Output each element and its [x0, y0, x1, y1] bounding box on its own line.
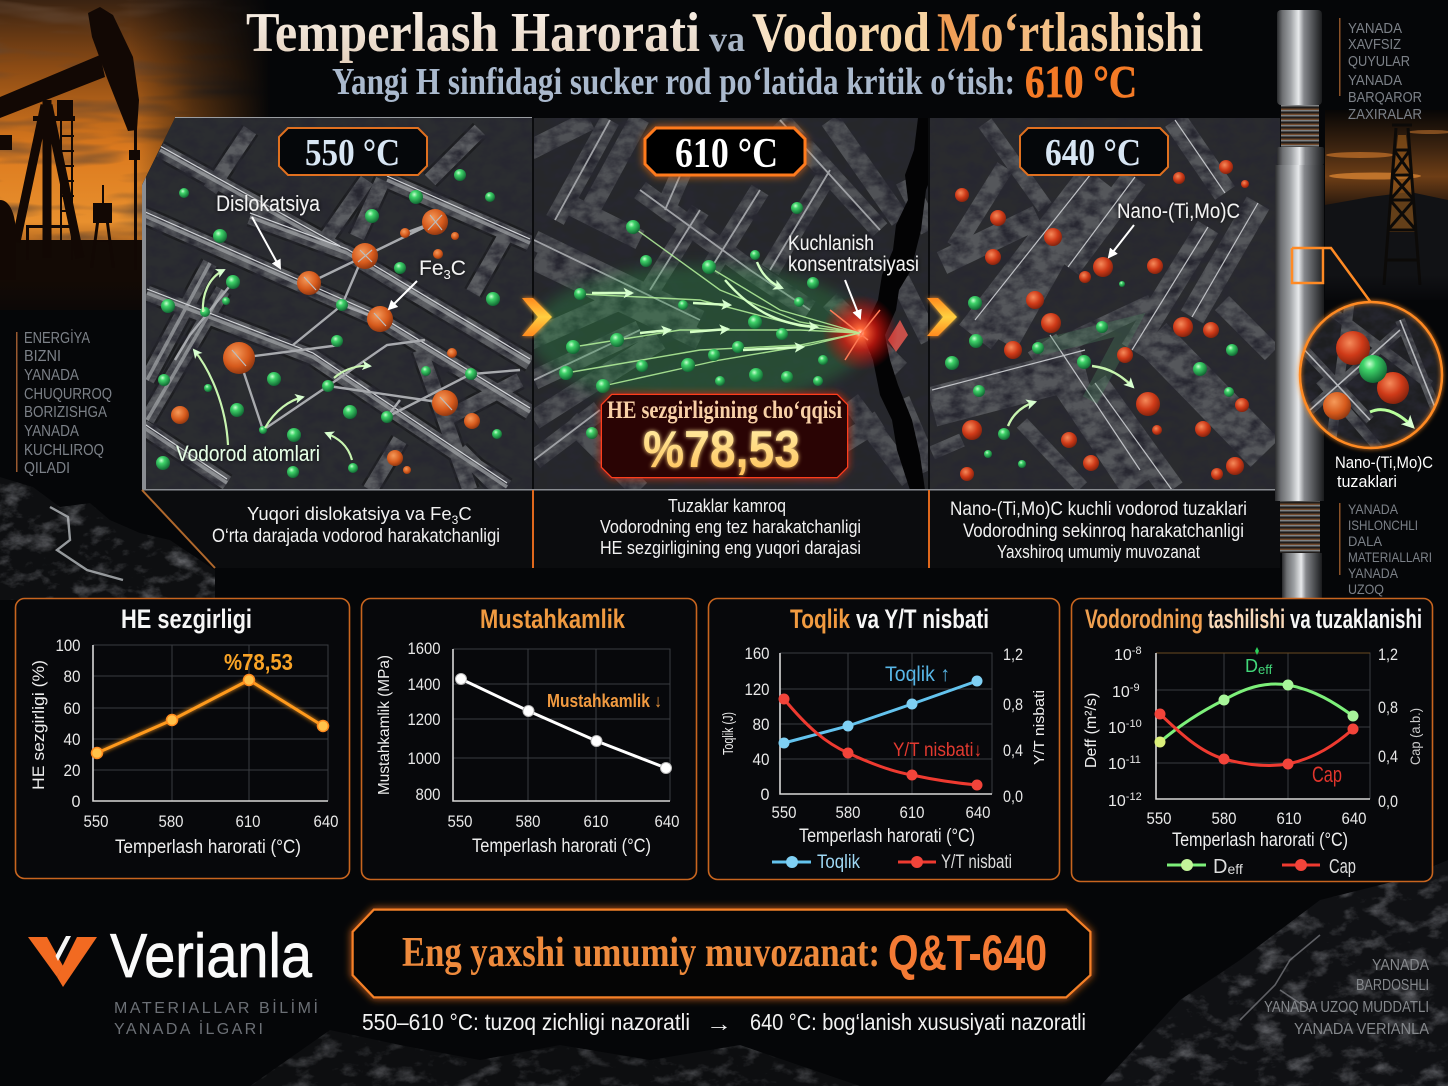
chart panel: Mustahkamlik — [362, 598, 696, 880]
sucker rod — [1275, 10, 1442, 598]
right lower text: YANADA — [1348, 565, 1399, 581]
line chart: Deff and Cap: 640 — [1342, 809, 1366, 828]
panel: 610 °C — [530, 118, 936, 490]
left side text: YANADA — [24, 423, 79, 440]
chart panel: Vodorodning tashilishi va tuzaklanishi — [1072, 598, 1432, 882]
panel: 640 °C — [930, 118, 1280, 490]
right lower text: DALA — [1348, 533, 1383, 549]
caption 610: HE sezgirligining eng yuqori darajasi — [600, 537, 861, 558]
label: Dislokatsiya: Dislokatsiya — [216, 191, 321, 216]
text: control mechanism: → — [706, 1011, 732, 1036]
line chart: HE sensitivity: 640 — [314, 812, 338, 831]
left side text: BORIZISHGA — [24, 404, 107, 421]
left side text: QILADI — [24, 460, 70, 477]
line chart: toughness and Y/T: 0,4 — [1003, 741, 1023, 760]
line chart: HE sensitivity: 100 — [56, 636, 80, 655]
arrows: hydrogen motion — [194, 270, 370, 460]
caption 550: C — [458, 503, 472, 524]
scene: mountain and rocks lower left — [0, 475, 215, 600]
caption 610 — [600, 495, 861, 558]
line chart: Deff and Cap: 0,0 — [1378, 792, 1398, 811]
label: stress concentration: konsentratsiyasi — [788, 253, 919, 276]
legend — [772, 852, 1012, 873]
right top text: YANADA — [1348, 73, 1402, 89]
caption 640: Yaxshiroq umumiy muvozanat — [997, 541, 1200, 562]
icon: logo mark — [28, 936, 97, 987]
scene: sunset with oil pumpjack — [0, 0, 300, 480]
line chart: Deff and Cap: 10 — [1108, 720, 1126, 737]
text: control mechanism: 640 °C: bog‘lanish xususiyati nazoratli — [750, 1009, 1086, 1035]
arrows: chevrons between panels — [522, 298, 957, 336]
line chart: HE sensitivity: 80 — [64, 667, 80, 686]
line chart: HE sensitivity: 610 — [236, 812, 260, 831]
line chart: HE sensitivity: 60 — [64, 699, 80, 718]
line chart: Deff and Cap: Cap — [1312, 762, 1342, 787]
left side text: BIZNI — [24, 348, 61, 365]
legend: Toqlik — [817, 852, 860, 873]
line chart: strength: 640 — [654, 812, 680, 831]
title — [246, 2, 1203, 64]
right top text — [1339, 18, 1422, 123]
label: Fe3C: 3 — [444, 267, 451, 282]
line chart: strength: 1600 — [408, 639, 440, 658]
captions under panels — [142, 489, 1280, 568]
spheres: hydrogen atoms — [945, 281, 1238, 468]
label: Nano-(Ti,Mo)C — [1109, 200, 1240, 257]
callout: zoom box and lens — [1292, 248, 1442, 450]
label: Nano-(Ti,Mo)C: Nano-(Ti,Mo)C — [1117, 200, 1240, 223]
line chart: strength: 550 — [448, 812, 472, 831]
line chart: toughness and Y/T: 580 — [836, 803, 860, 822]
line chart: Deff and Cap: -10 — [1126, 718, 1142, 730]
text: control mechanism — [362, 1009, 1086, 1036]
line chart: Deff and Cap: 580 — [1212, 809, 1236, 828]
right top text: BARQAROR — [1348, 90, 1422, 106]
chart heading — [1085, 604, 1422, 634]
callout: HE peak — [602, 395, 847, 479]
chart heading — [790, 604, 989, 634]
line chart: Deff and Cap: Cap (a.b.) — [1407, 708, 1423, 765]
spheres: Fe3C — [171, 209, 480, 474]
label: Fe3C — [389, 257, 466, 309]
spheres: nano carbides — [955, 160, 1249, 481]
right lower text: MATERIALLARI — [1348, 549, 1432, 565]
chart heading: va Y/T nisbati — [856, 604, 989, 634]
legend: eff — [1227, 861, 1243, 877]
title: Mo‘rtlashishi — [937, 2, 1203, 64]
line chart: Deff and Cap — [1083, 645, 1423, 851]
logo: Verianla: YANADA İLGARI — [114, 1019, 263, 1038]
title: va — [709, 19, 745, 59]
line chart: strength: 580 — [516, 812, 540, 831]
line chart: toughness and Y/T: 0,8 — [1003, 695, 1023, 714]
chart heading: HE sezgirligi — [121, 604, 252, 634]
legend: Cap — [1329, 856, 1356, 878]
caption 640: Nano-(Ti,Mo)C kuchli vodorod tuzaklari — [950, 498, 1247, 520]
line chart: toughness and Y/T: Temperlash harorati (°C) — [799, 826, 975, 847]
line chart: Deff and Cap: 1,2 — [1378, 645, 1398, 664]
line chart: strength — [376, 639, 680, 857]
right bottom text — [1264, 957, 1429, 1038]
line chart: Deff and Cap: D — [1245, 656, 1258, 676]
line chart: strength: 800 — [416, 785, 440, 804]
line chart: Deff and Cap: -9 — [1130, 682, 1140, 694]
line chart: strength: 1200 — [408, 710, 440, 729]
chart heading: tashilishi — [1208, 604, 1285, 634]
line chart: strength: Mustahkamlik ↓ — [547, 691, 662, 711]
caption 550: Yuqori dislokatsiya va Fe — [247, 503, 452, 524]
temperature badge: 640 °C — [1020, 128, 1168, 175]
line chart: strength: Mustahkamlik (MPa) — [376, 655, 393, 795]
right bottom text: YANADA — [1372, 957, 1429, 974]
crack — [822, 118, 936, 490]
label: stress concentration: Kuchlanish — [788, 232, 874, 255]
subtitle: 610 °C — [1025, 56, 1137, 107]
line chart: HE sensitivity: %78,53 — [224, 649, 293, 675]
spheres: hydrogen atoms — [559, 202, 828, 439]
right lower text: UZOQ — [1348, 581, 1384, 597]
line chart: toughness and Y/T — [720, 644, 1048, 847]
label: Fe3C: Fe — [419, 257, 444, 280]
caption 610: Vodorodning eng tez harakatchanligi — [600, 516, 861, 537]
right lower text: YANADA — [1348, 501, 1399, 517]
line chart: Deff and Cap: Temperlash harorati (°C) — [1172, 830, 1348, 851]
legend — [1167, 856, 1356, 878]
arrows: hydrogen motion — [1008, 366, 1133, 426]
right top text: XAVFSIZ — [1348, 37, 1401, 53]
rays to crack tip — [566, 227, 860, 386]
line chart: toughness and Y/T: 0,0 — [1003, 787, 1023, 806]
right top text: QUYULAR — [1348, 54, 1410, 70]
line chart: Deff and Cap: -8 — [1132, 645, 1142, 657]
logo: Verianla: Verianla — [110, 922, 312, 991]
label: nano traps: tuzaklari — [1337, 472, 1397, 491]
caption 610: Tuzaklar kamroq — [668, 495, 786, 516]
background — [252, 860, 1448, 1086]
line chart: Deff and Cap: 0,8 — [1378, 698, 1398, 717]
logo: Verianla — [28, 922, 318, 1038]
caption 550: 3 — [452, 513, 459, 527]
line chart: HE sensitivity: 580 — [158, 812, 184, 831]
microstructure bars 610 — [530, 118, 936, 490]
left side text: YANADA — [24, 367, 79, 384]
line chart: toughness and Y/T: 120 — [744, 680, 770, 699]
temperature badge: 610 °C: 610 °C — [675, 131, 778, 177]
text: control mechanism: 550–610 °C: tuzoq zichligi nazoratli — [362, 1009, 690, 1035]
line chart: strength: 610 — [584, 812, 608, 831]
label: nano traps: Nano-(Ti,Mo)C — [1335, 453, 1433, 472]
label: Vodorod atomlari: Vodorod atomlari — [176, 441, 320, 466]
line chart: toughness and Y/T: 0 — [760, 785, 770, 804]
line chart: toughness and Y/T: 550 — [772, 803, 796, 822]
left side text: CHUQURROQ — [24, 386, 112, 403]
arrows: hydrogen flow — [592, 262, 817, 350]
right bottom text: BARDOSHLI — [1356, 977, 1429, 994]
label: nano traps — [1335, 453, 1433, 491]
left side text: ENERGİYA — [24, 328, 90, 347]
label: stress concentration — [788, 232, 919, 318]
line chart: toughness and Y/T: 610 — [900, 803, 924, 822]
title: Vodorod — [752, 2, 930, 64]
callout: HE peak: HE sezgirligining cho‘qqisi — [607, 397, 842, 424]
scene: right sky and derrick — [1325, 110, 1448, 505]
line chart: Deff and Cap: Deff (m²/s) — [1083, 693, 1100, 768]
right bottom text: YANADA VERIANLA — [1294, 1021, 1429, 1038]
line chart: Deff and Cap: 0,4 — [1378, 747, 1398, 766]
right lower text: ISHLONCHLI — [1348, 517, 1418, 533]
icon: oil derrick — [1384, 125, 1420, 285]
line chart: toughness and Y/T: Toqlik (J) — [720, 712, 737, 755]
line chart: Deff and Cap: 10 — [1108, 793, 1126, 810]
legend: D — [1213, 856, 1227, 878]
line chart: toughness and Y/T: Y/T nisbati — [1031, 690, 1048, 765]
line chart: HE sensitivity: 550 — [84, 812, 108, 831]
line chart: strength: Temperlash harorati (°C) — [472, 836, 651, 857]
line chart: HE sensitivity: HE sezgirligi (%) — [29, 660, 48, 790]
left side text: KUCHLIROQ — [24, 442, 104, 459]
left side text — [16, 328, 112, 477]
line chart: strength: 1400 — [408, 675, 440, 694]
callout: best balance banner: Q&T-640 — [888, 925, 1047, 981]
line chart: toughness and Y/T: 40 — [752, 750, 770, 769]
right top text: YANADA — [1348, 21, 1402, 37]
line chart: Deff and Cap: -12 — [1126, 791, 1142, 803]
line chart: strength: 1000 — [408, 749, 440, 768]
logo: Verianla: MATERIALLAR BİLİMİ — [114, 998, 318, 1017]
line chart: HE sensitivity: 40 — [64, 730, 80, 749]
line chart: Deff and Cap: eff — [1258, 662, 1273, 677]
right lower text — [1339, 501, 1432, 597]
line chart: toughness and Y/T: 1,2 — [1003, 645, 1023, 664]
callout: best balance banner: Eng yaxshi umumiy muvozanat: — [402, 930, 880, 976]
temperature badge: 640 °C: 640 °C — [1045, 132, 1141, 174]
caption 640: Vodorodning sekinroq harakatchanligi — [963, 520, 1244, 542]
label: Dislokatsiya — [216, 191, 321, 268]
line chart: toughness and Y/T: Toqlik ↑ — [885, 663, 950, 686]
caption 640 — [950, 498, 1247, 562]
temperature badge: 550 °C — [279, 128, 427, 175]
line chart: Deff and Cap: 10 — [1112, 684, 1130, 701]
temperature badge: 550 °C: 550 °C — [305, 132, 400, 174]
icon: pumpjack silhouette — [0, 7, 140, 280]
chart heading: Vodorodning — [1085, 604, 1203, 634]
line chart: HE sensitivity — [29, 636, 338, 858]
line chart: HE sensitivity: 20 — [64, 761, 80, 780]
chart panel: Toqlik va Y/T nisbati — [708, 598, 1060, 880]
line chart: toughness and Y/T: 160 — [744, 644, 770, 663]
line chart: toughness and Y/T: 80 — [752, 715, 770, 734]
chart heading: Mustahkamlik — [480, 604, 626, 634]
line chart: HE sensitivity: Temperlash harorati (°C) — [115, 837, 301, 858]
caption 550: O‘rta darajada vodorod harakatchanligi — [212, 525, 500, 547]
callout: HE peak: %78,53 — [643, 421, 800, 479]
line chart: toughness and Y/T: 640 — [966, 803, 990, 822]
line chart: Deff and Cap: 10 — [1114, 647, 1132, 664]
line chart: Deff and Cap: -11 — [1126, 754, 1141, 766]
title: Temperlash Harorati — [246, 2, 700, 64]
microstructure bars 550 — [142, 118, 532, 490]
panel: microstructure strip frame — [142, 118, 1280, 568]
line chart: Deff and Cap: 610 — [1276, 809, 1302, 828]
line chart: Deff and Cap: 550 — [1146, 809, 1172, 828]
chart panel: HE sezgirligi — [16, 598, 350, 878]
callout: best balance banner — [353, 910, 1090, 997]
legend: Y/T nisbati — [941, 852, 1012, 873]
caption 550 — [212, 503, 500, 547]
microstructure bars 640 — [930, 118, 1280, 490]
chart heading: Toqlik — [790, 604, 851, 634]
right top text: ZAXIRALAR — [1348, 107, 1422, 123]
panel: 550 °C — [142, 118, 532, 490]
line chart: HE sensitivity: 0 — [72, 792, 80, 811]
line chart: toughness and Y/T: Y/T nisbati↓ — [893, 740, 982, 761]
label: Fe3C: C — [451, 257, 466, 280]
subtitle: Yangi H sinfidagi sucker rod po‘latida kritik o‘tish: — [332, 61, 1015, 103]
spheres: hydrogen atoms — [156, 169, 502, 478]
line chart: Deff and Cap: 10 — [1108, 756, 1126, 773]
